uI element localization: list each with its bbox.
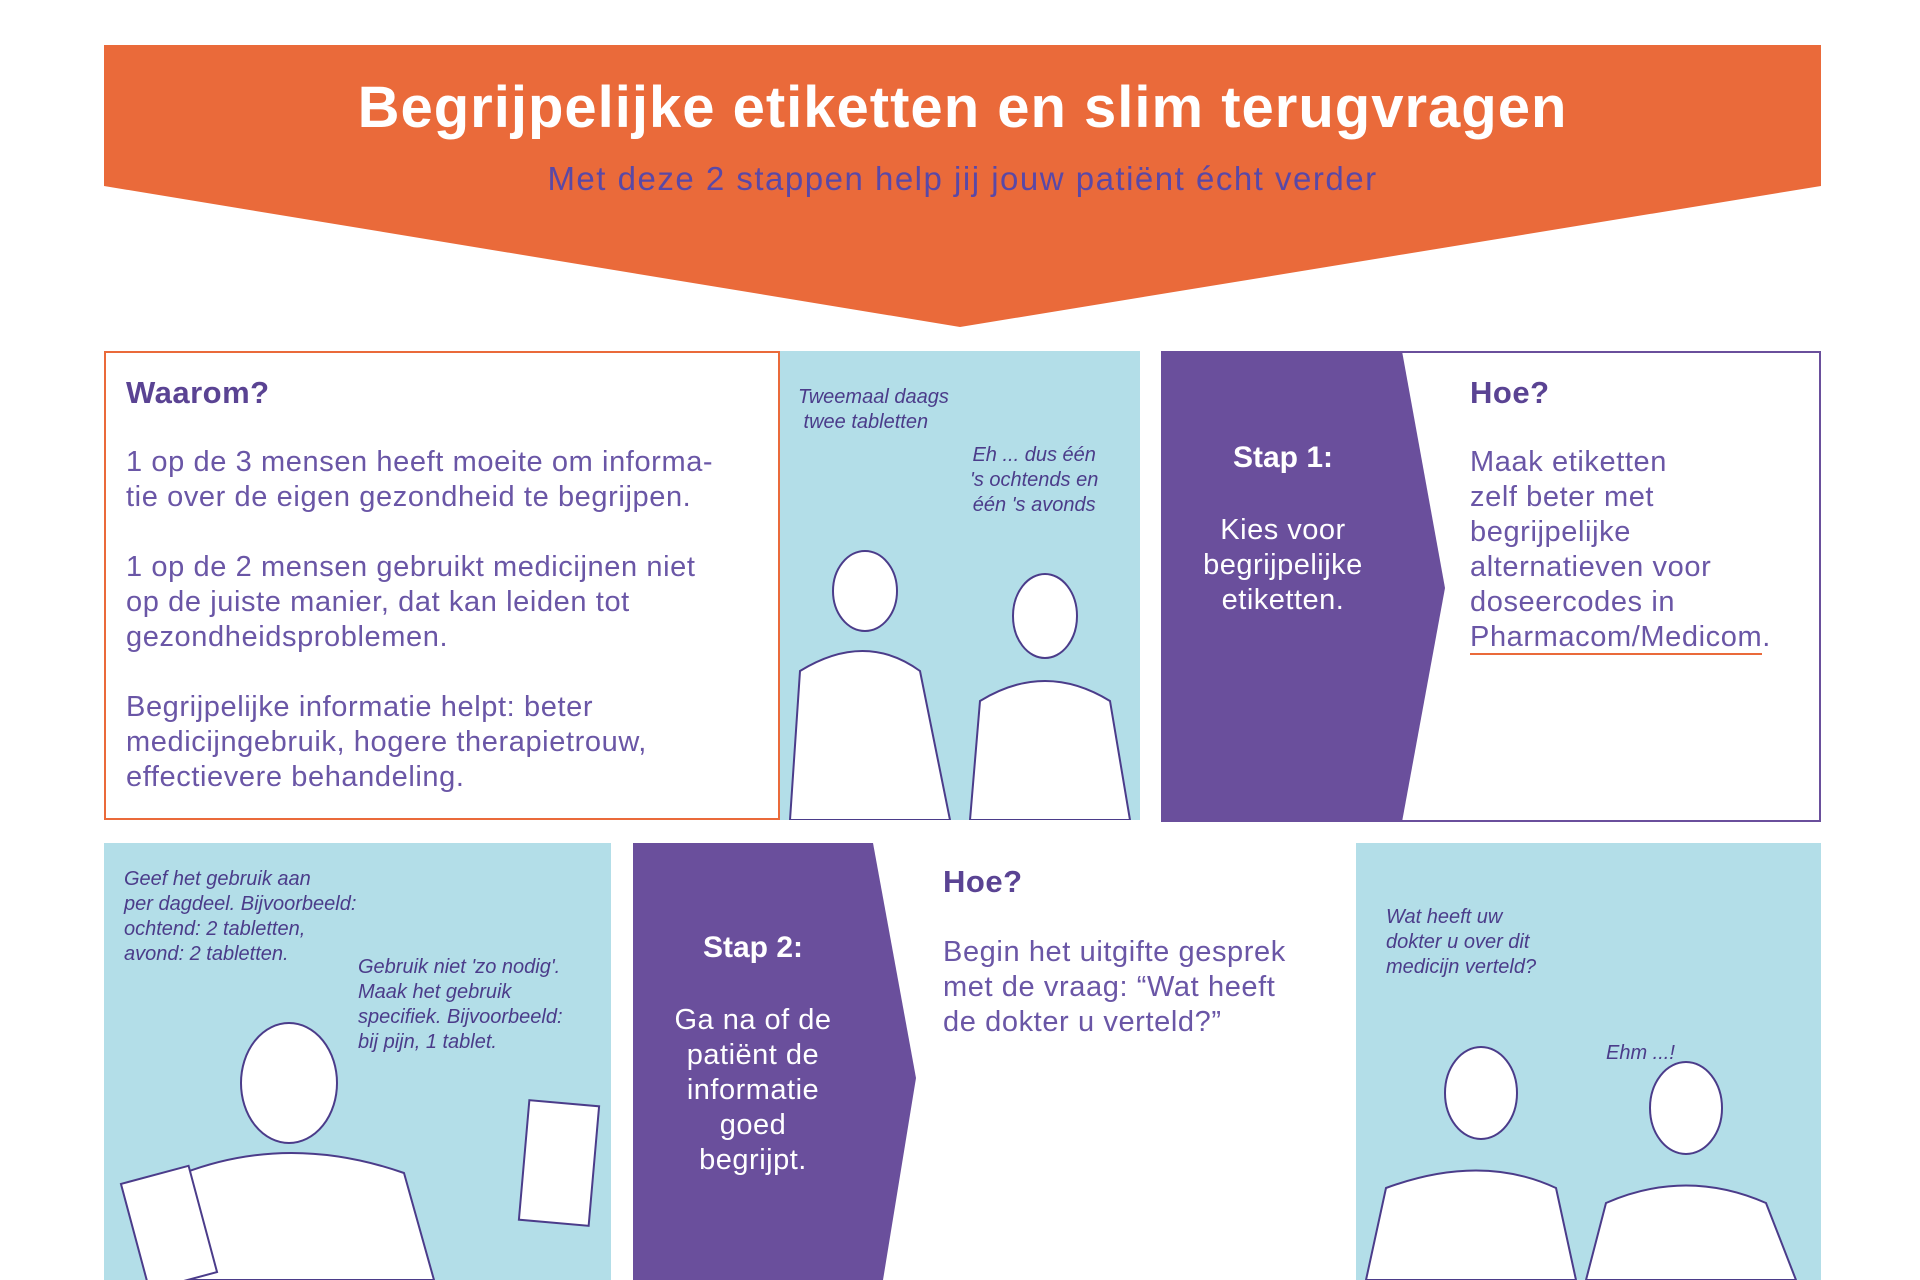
text: stap 2 [674, 1004, 832, 1176]
text: waarom: 1 op de 2 mensen gebruikt medicijnen niet [126, 551, 696, 583]
cartoon 2: avond: 2 tabletten. [124, 943, 289, 965]
heading: stap 1: Stap 1: [1233, 441, 1333, 474]
cartoon 3: Ehm ...! [1606, 1042, 1675, 1064]
text: hoe 1: alternatieven voor [1470, 551, 1711, 583]
text: stap 2: informatie [687, 1074, 819, 1106]
text: stap 2: begrijpt. [699, 1144, 807, 1176]
cartoon 2: bij pijn, 1 tablet. [358, 1031, 497, 1053]
text: hoe 2: Begin het uitgifte gesprek [943, 936, 1286, 968]
cartoon 2 [104, 843, 611, 1280]
text: hoe 1: doseercodes in [1470, 586, 1675, 618]
cartoon 2: Geef het gebruik aan [124, 868, 311, 890]
cartoon 1: Tweemaal daags [798, 386, 949, 408]
text: waarom: effectievere behandeling. [126, 761, 465, 793]
text: waarom [126, 446, 713, 793]
cartoon 3 [1356, 843, 1821, 1280]
panel: stap 2 [633, 843, 916, 1280]
text: stap 1: Kies voor [1220, 514, 1346, 546]
heading: stap 2: Stap 2: [703, 931, 803, 964]
title: Begrijpelijke etiketten en slim terugvragen [358, 75, 1567, 140]
text: hoe 1: zelf beter met [1470, 481, 1654, 513]
cartoon 2: Gebruik niet 'zo nodig'. [358, 956, 560, 978]
panel: waarom [104, 351, 780, 820]
subtitle: Met deze 2 stappen help jij jouw patiënt écht verder [547, 160, 1378, 197]
text: waarom: tie over de eigen gezondheid te begrijpen. [126, 481, 691, 513]
text: stap 1: etiketten. [1222, 584, 1344, 616]
cartoon 2: per dagdeel. Bijvoorbeeld: [124, 893, 356, 915]
cartoon 1: 's ochtends en [970, 469, 1098, 491]
text: hoe 1 [1470, 446, 1771, 655]
cartoon 2: ochtend: 2 tabletten, [124, 918, 305, 940]
text: waarom: medicijngebruik, hogere therapietrouw, [126, 726, 647, 758]
text: waarom: op de juiste manier, dat kan leiden tot [126, 586, 630, 618]
cartoon 3: dokter u over dit [1386, 931, 1529, 953]
cartoon 3: medicijn verteld? [1386, 956, 1536, 978]
text: waarom: Begrijpelijke informatie helpt: beter [126, 691, 593, 723]
text: stap 1 [1203, 514, 1363, 616]
text: hoe 1: Pharmacom/Medicom. [1470, 621, 1771, 653]
cartoon 3: Wat heeft uw [1386, 906, 1502, 928]
text: stap 2: goed [720, 1109, 786, 1141]
cartoon 1: Eh ... dus één [972, 444, 1096, 466]
text: hoe 1: begrijpelijke [1470, 516, 1631, 548]
panel: stap 1 [1161, 351, 1821, 822]
heading: hoe 2: Hoe? [943, 864, 1022, 899]
cartoon 1: twee tabletten [804, 411, 928, 433]
text: hoe 2: de dokter u verteld?” [943, 1006, 1222, 1038]
text: waarom: 1 op de 3 mensen heeft moeite om informa- [126, 446, 713, 478]
text: waarom: gezondheidsproblemen. [126, 621, 448, 653]
text: hoe 2 [943, 936, 1286, 1038]
cartoon 1: één 's avonds [973, 494, 1096, 516]
heading: hoe 1: Hoe? [1470, 375, 1550, 410]
banner [104, 45, 1821, 327]
text: stap 2: patiënt de [687, 1039, 819, 1071]
text: stap 1: begrijpelijke [1203, 549, 1363, 581]
cartoon 2: Maak het gebruik [358, 981, 511, 1003]
text: hoe 2: met de vraag: “Wat heeft [943, 971, 1275, 1003]
heading: waarom: Waarom? [126, 375, 270, 410]
text: stap 2: Ga na of de [674, 1004, 832, 1036]
text: hoe 1: Maak etiketten [1470, 446, 1667, 478]
cartoon 2: specifiek. Bijvoorbeeld: [358, 1006, 563, 1028]
cartoon 1 [780, 351, 1140, 820]
